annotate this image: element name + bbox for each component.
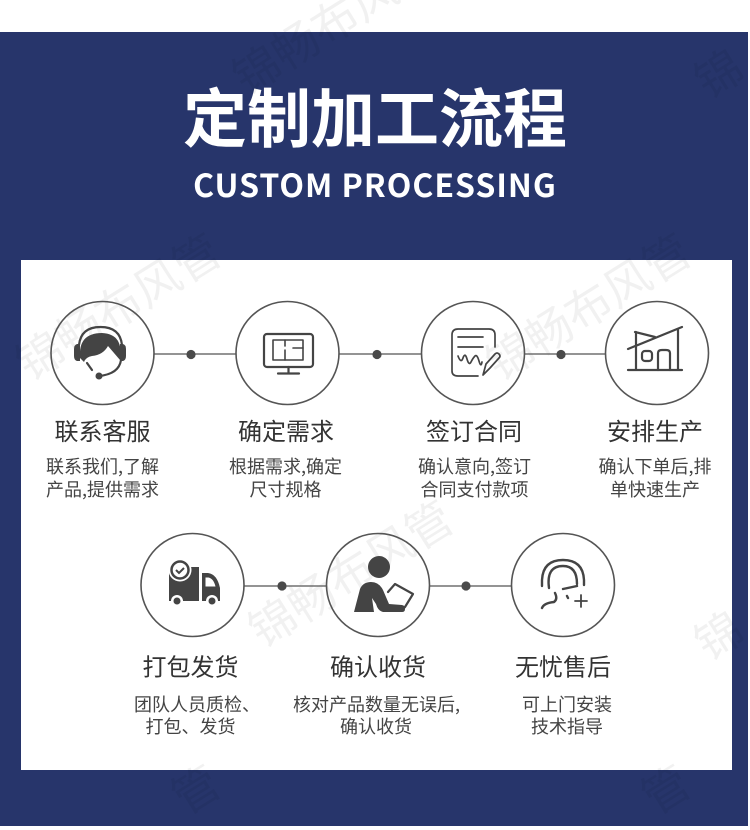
step: 确定需求: 尺寸规格 [250,476,322,502]
watermarks: 管 [157,748,231,828]
heading: 无忧售后 [515,648,611,682]
connector dots [186,350,566,591]
description: 确认下单后,排 [598,453,712,479]
icon: after-sales person [542,560,587,608]
heading: 确定需求 [238,412,334,447]
subtitle: CUSTOM PROCESSING [193,161,557,207]
connector lines [154,354,605,586]
step: 打包发货: 打包、发货 [146,713,236,739]
watermarks: 锦畅布风管 [472,216,702,394]
step: 确认收货: 确认收货 [340,713,412,739]
title: 定制加工流程 [183,69,567,161]
description: 联系我们,了解 [46,453,159,479]
watermarks: 锦畅布风管 [2,216,232,394]
icon: delivery truck [168,558,220,607]
step: 签订合同: 合同支付款项 [420,476,528,502]
step: 联系客服: 产品,提供需求 [46,476,159,502]
step: 安排生产 [598,302,712,502]
icon: factory building [628,327,682,370]
description: 根据需求,确定 [229,453,342,479]
watermarks: 管 [627,748,701,828]
heading: 安排生产 [607,412,703,447]
white panel [21,260,732,770]
step: 无忧售后 [512,534,614,739]
heading: 确认收货 [330,648,426,682]
step: 联系客服 [46,302,159,502]
icon: monitor with floor plan [264,334,313,374]
step: 确认收货 [293,534,460,739]
step: 打包发货 [134,534,260,739]
step: 安排生产: 单快速生产 [610,476,700,502]
heading: 联系客服 [54,412,150,447]
description: 核对产品数量无误后, [293,691,460,717]
description: 确认意向,签订 [418,453,531,479]
heading: 签订合同 [426,412,522,447]
watermarks: 锦畅布风管 [234,483,464,661]
description: 团队人员质检、 [134,691,260,717]
icon: person with tablet [354,556,413,612]
icon: headset agent [74,327,126,380]
heading: 打包发货 [142,648,238,682]
step: 确定需求 [229,302,342,502]
description: 可上门安装 [522,691,612,717]
icon: contract and pen [452,329,500,376]
step: 签订合同 [418,302,531,502]
step: 无忧售后: 技术指导 [531,713,603,739]
